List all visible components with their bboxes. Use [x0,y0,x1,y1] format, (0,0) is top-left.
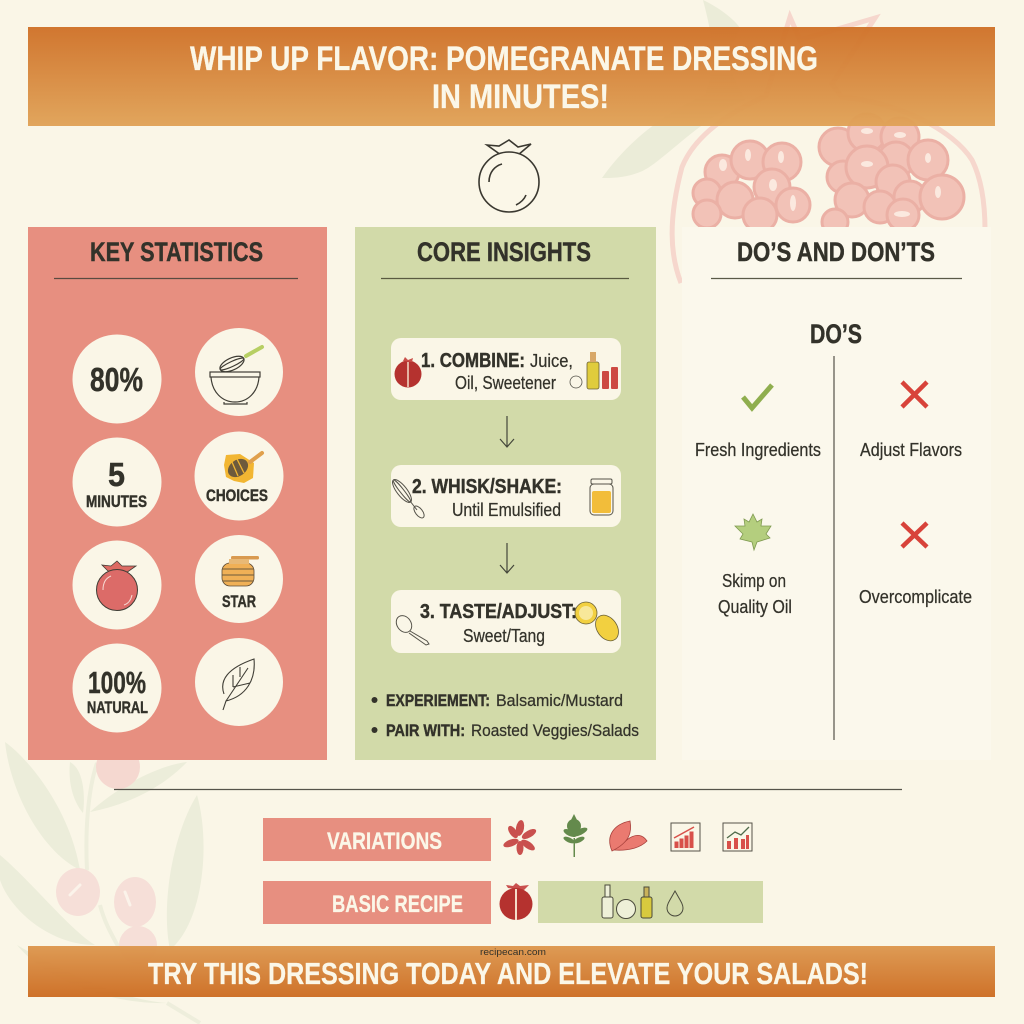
icon: green leaf [735,514,771,550]
label: skimp on quality oil [718,570,792,617]
icon: cross [902,523,927,547]
icon: chart line [723,823,752,851]
title banner: IN MINUTES! [432,78,609,116]
variations bar: VARIATIONS [327,828,442,855]
stat: 5 minutes [72,438,162,526]
heading: do's and don'ts: DO’S AND DON’TS [737,237,935,267]
step 2: whisk/shake: 2. WHISK/SHAKE: [412,476,562,498]
stat: star with honey pot [195,535,283,623]
watermark: recipecan.com [480,947,546,958]
stat: choices with honey dipper [194,432,284,520]
basic recipe bar [263,881,491,924]
bullet list: Balsamic/Mustard [496,691,623,710]
bullet list: PAIR WITH: [386,721,465,740]
stat: 80%: 80% [90,361,143,398]
stat: 100% natural [72,644,162,732]
footer banner: TRY THIS DRESSING TODAY AND ELEVATE YOUR SALADS! [148,956,868,991]
background art: olive branch [0,742,204,1023]
panel: do's and don'ts [682,227,991,760]
step 3: taste/adjust [391,590,623,653]
label: overcomplicate: Overcomplicate [859,586,972,607]
title banner: WHIP UP FLAVOR: POMEGRANATE DRESSING [190,40,818,78]
background art: pomegranate [602,0,985,283]
icon: chart up [671,823,700,851]
label: skimp on quality oil: Skimp on [722,570,786,591]
recipe ingredients strip [538,881,763,923]
icon: red star leaf [502,819,538,855]
icon: pomegranate [72,540,162,630]
bullet list: Roasted Veggies/Salads [471,721,639,740]
step 3: taste/adjust: Sweet/Tang [463,626,545,646]
heading: core insights: CORE INSIGHTS [417,237,591,267]
step 1: combine: Juice, [530,351,573,371]
step 1: combine [391,338,621,400]
panel: key statistics [28,227,327,760]
title banner [28,27,995,126]
footer banner [28,946,995,997]
stat: 80% [72,334,162,424]
icon: whisk and bowl [195,328,283,416]
stat: 100% natural: 100% [88,665,146,700]
stat: 5 minutes: 5 [108,456,125,493]
step 3: taste/adjust: 3. TASTE/ADJUST: [420,601,577,623]
step 1: combine: 1. COMBINE: [421,350,525,372]
icon: pomegranate outline [479,140,539,212]
arrow: step 1 to 2 [500,416,514,447]
label: skimp on quality oil: Quality Oil [718,596,792,617]
bullet list: EXPERIEMENT: [386,691,490,710]
icon: check [743,385,772,408]
subheading: do's: DO’S [810,319,862,349]
stat: star with honey pot: STAR [222,593,256,611]
icon: red leaves [610,821,647,851]
step 2: whisk/shake: Until Emulsified [452,500,561,520]
variations bar [263,818,491,861]
arrow: step 2 to 3 [500,543,514,573]
stat: choices with honey dipper: CHOICES [206,487,268,505]
basic recipe bar: BASIC RECIPE [332,891,463,918]
icon: leaf outline [195,638,283,726]
label: adjust flavors: Adjust Flavors [860,439,962,460]
panel: core insights [355,227,656,760]
icon: cross [902,382,927,407]
heading: key statistics: KEY STATISTICS [90,237,263,267]
step 2: whisk/shake [389,465,621,527]
stat: 5 minutes: MINUTES [86,492,147,511]
icon: green herb [562,814,589,857]
stat: 100% natural: NATURAL [87,698,148,717]
step 1: combine: Oil, Sweetener [455,373,556,393]
bullet list [372,691,639,740]
icon: pomegranate half [500,883,532,920]
label: fresh ingredients: Fresh Ingredients [695,439,821,460]
